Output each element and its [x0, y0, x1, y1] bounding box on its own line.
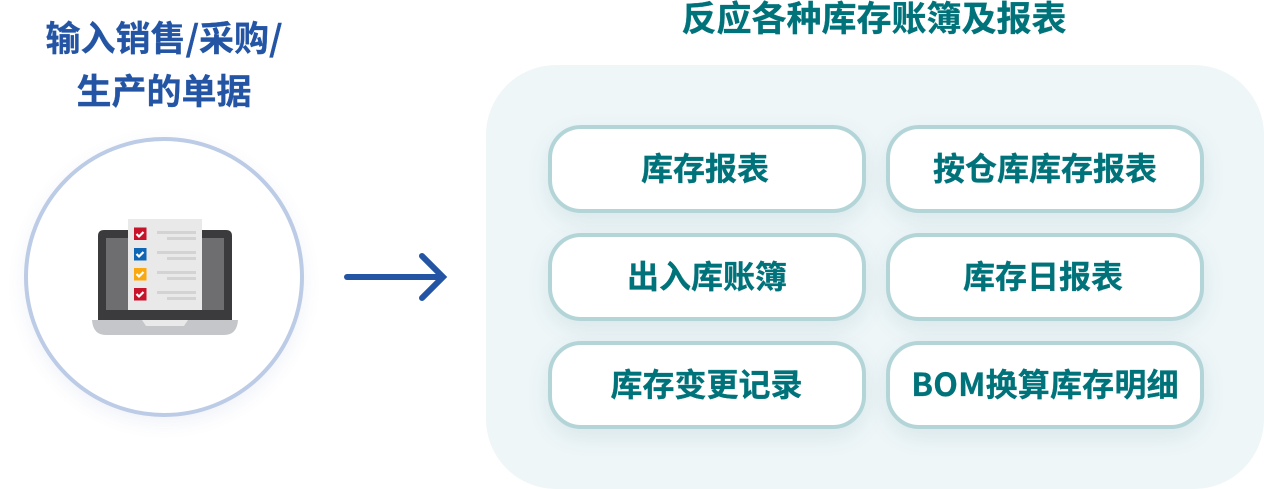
left heading: 生产的单据 [76, 64, 252, 115]
card: 库存日报表: 库存日报表 [963, 252, 1123, 298]
card: BOM换算库存明细: BOM换算库存明细 [911, 360, 1179, 406]
left heading: 输入销售/采购/ [45, 11, 283, 62]
left heading [45, 11, 283, 115]
card: 出入库账簿 [548, 233, 866, 321]
card: 按仓库库存报表: 按仓库库存报表 [933, 144, 1157, 190]
card: 按仓库库存报表 [886, 125, 1204, 213]
circle with laptop icon [24, 137, 304, 417]
card: 库存变更记录: 库存变更记录 [610, 360, 802, 406]
arrow [344, 253, 448, 301]
icon: laptop with checklist [92, 219, 238, 335]
card: 库存变更记录 [548, 341, 866, 429]
card: 库存日报表 [886, 233, 1204, 321]
panel: reports [486, 65, 1264, 489]
card: 库存报表 [548, 125, 866, 213]
card: BOM换算库存明细 [886, 341, 1204, 429]
card: 库存报表: 库存报表 [641, 144, 769, 190]
card: 出入库账簿: 出入库账簿 [627, 252, 787, 298]
